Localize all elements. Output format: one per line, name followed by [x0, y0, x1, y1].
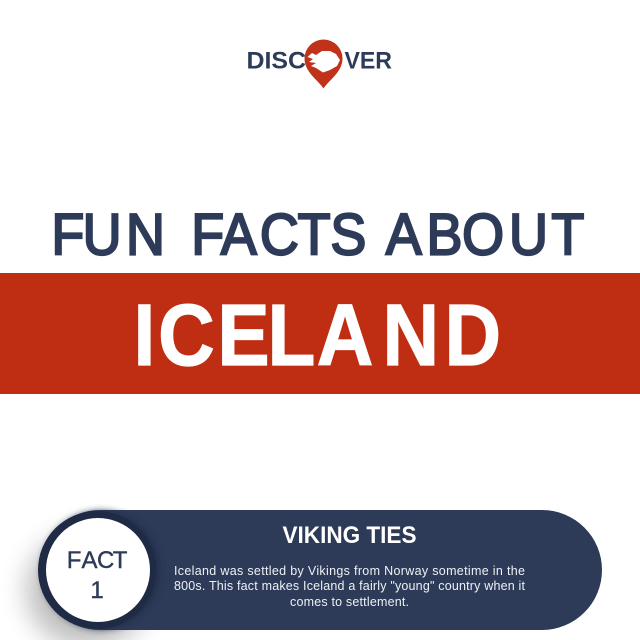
logo text left: DISC	[246, 48, 306, 74]
fact body text: comes to settlement.	[290, 595, 409, 609]
badge: Fact 1: 1	[90, 577, 104, 604]
heading: Fun Facts About: ABOUT	[386, 202, 584, 267]
banner: red band with Iceland	[0, 273, 640, 394]
badge text: FACT	[67, 547, 128, 574]
logo text right: VER	[344, 48, 392, 74]
icon: red map pin with Iceland	[304, 40, 342, 88]
panel: fact 1	[26, 510, 602, 640]
badge shadow	[26, 532, 150, 640]
fact body text: 800s. This fact makes Iceland a fairly "young" country when it	[174, 579, 526, 593]
fact body text: Iceland was settled by Vikings from Norway sometime in the	[174, 564, 525, 578]
heading: Fun Facts About	[51, 202, 584, 267]
fact body text	[174, 564, 526, 609]
pill background	[40, 510, 602, 630]
heading: Fun Facts About: FUN	[51, 202, 165, 267]
banner title: ICELAND	[134, 286, 501, 384]
badge: Fact 1	[38, 511, 160, 629]
heading: Fun Facts About: FACTS	[191, 202, 366, 267]
fact heading: VIKING TIES	[282, 522, 416, 549]
logo: Discover	[246, 40, 392, 88]
